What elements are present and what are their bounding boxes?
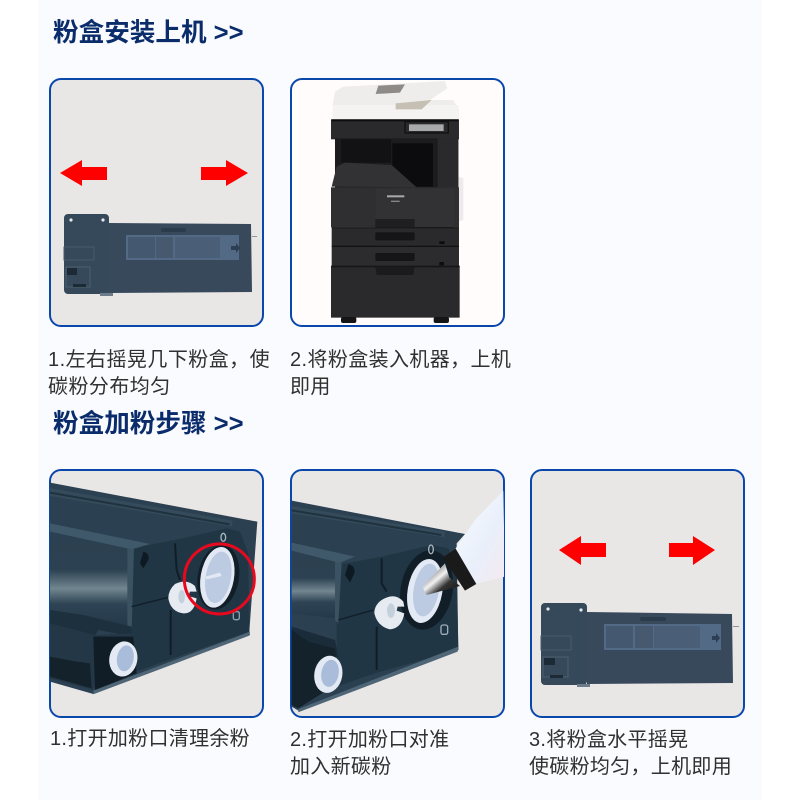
arrow: right <box>669 536 715 565</box>
caption: step 2: 2.将粉盒装入机器，上机 <box>290 348 511 371</box>
caption: step 1: 碳粉分布均匀 <box>48 375 171 398</box>
caption: refill step 3: 使碳粉均匀，上机即用 <box>529 755 732 778</box>
callout: red circle <box>184 544 254 614</box>
panel: shake cartridge <box>50 79 263 326</box>
arrow: left <box>559 536 606 565</box>
arrow: right <box>201 160 248 186</box>
caption: step 1: 1.左右摇晃几下粉盒，使 <box>48 348 270 371</box>
icon: refill bottle <box>455 491 505 584</box>
caption: step 2: 即用 <box>290 376 331 398</box>
caption: refill step 3: 3.将粉盒水平摇晃 <box>529 728 688 751</box>
arrow: left <box>60 160 107 186</box>
icon: small port <box>314 656 342 693</box>
icon: toner cartridge <box>64 214 257 296</box>
icon: cartridge close-up <box>50 483 257 694</box>
caption: refill step 2: 2.打开加粉口对准 <box>290 728 449 751</box>
panel: open refill port <box>50 470 263 717</box>
caption: refill step 2: 加入新碳粉 <box>290 755 392 778</box>
panel: printer <box>291 79 504 326</box>
heading: install: 粉盒安装上机 >> <box>53 17 244 47</box>
panel: align refill bottle <box>291 470 505 717</box>
icon: refill port <box>200 547 234 608</box>
icon: refill port <box>407 559 442 623</box>
caption: refill step 1: 1.打开加粉口清理余粉 <box>50 727 250 750</box>
icon: white gear cap <box>168 582 197 613</box>
panel: shake horizontally <box>531 470 744 717</box>
icon: white gear cap <box>374 596 404 629</box>
icon: small port <box>109 641 138 676</box>
icon: toner cartridge <box>541 603 739 687</box>
heading: refill: 粉盒加粉步骤 >> <box>53 408 244 438</box>
icon: copier <box>331 81 463 323</box>
icon: cartridge close-up with bottle <box>292 491 505 712</box>
